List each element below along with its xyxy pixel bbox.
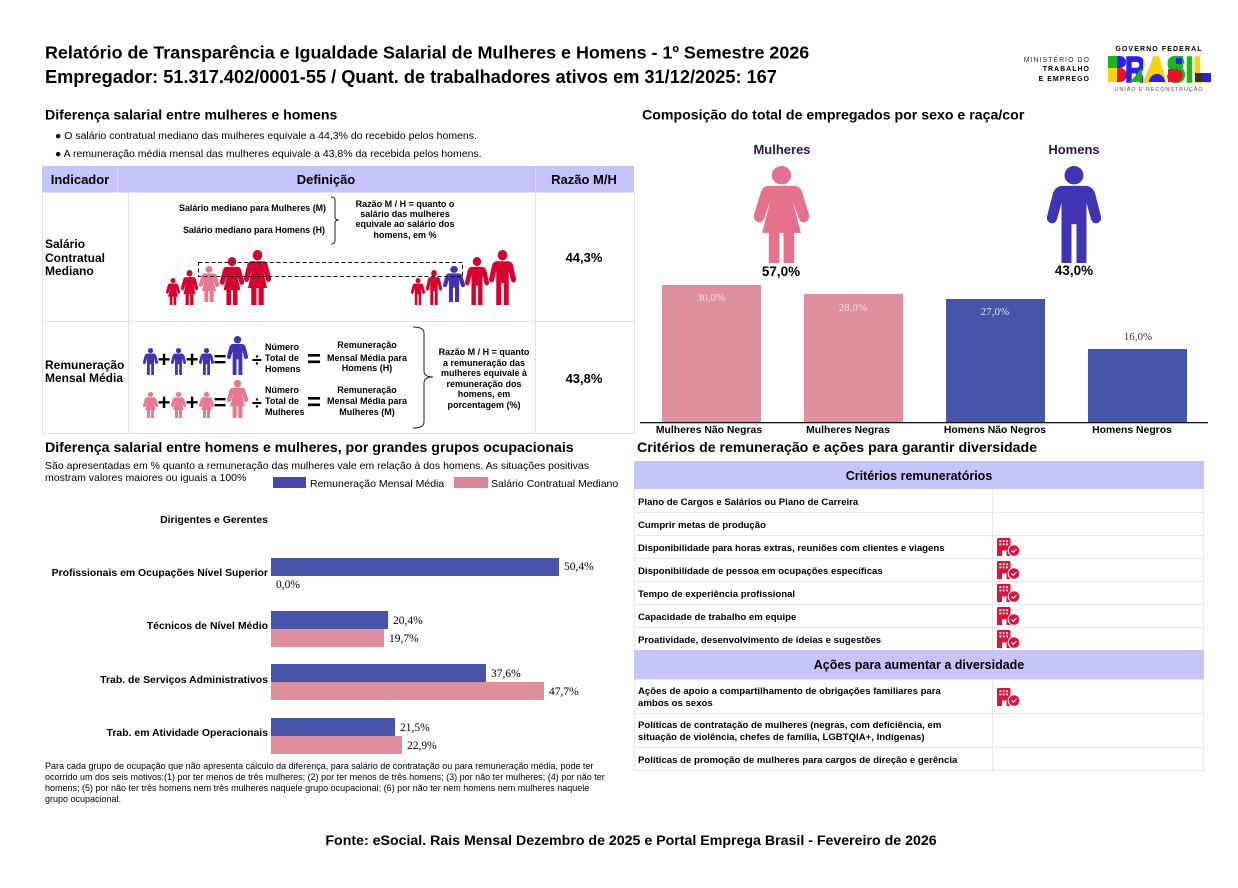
bar chart: grupos ocupacionais xyxy=(52,515,594,754)
formula: women: Mulheres xyxy=(265,407,305,417)
criteria rows: Cumprir metas de produção xyxy=(638,520,766,531)
ratio explanation: homens, em % xyxy=(373,230,437,240)
panel: criteria table xyxy=(634,461,1204,771)
table header xyxy=(42,166,634,192)
icons: criteria checks xyxy=(997,538,1020,649)
formula: women xyxy=(143,380,408,418)
criteria rows: Tempo de experiência profissional xyxy=(638,589,795,600)
action rows xyxy=(638,686,958,766)
row: salário contratual mediano xyxy=(45,197,603,305)
header: critérios remuneratórios: Critérios remuneratórios xyxy=(846,469,992,483)
formula: men: + xyxy=(186,347,198,372)
values: 37,6% xyxy=(491,668,521,680)
icons: men group xyxy=(411,250,516,305)
text block: chart subtitle: mostram valores maiores ou iguais a 100% xyxy=(45,472,246,484)
values: 20,4% xyxy=(393,615,423,627)
text block: footnote: grupo ocupacional. xyxy=(45,794,121,804)
table header: Definição xyxy=(297,172,355,187)
values: 22,9% xyxy=(407,740,437,752)
heading: diferença salarial: Diferença salarial entre mulheres e homens xyxy=(45,106,338,122)
panel: homens total: 43,0% xyxy=(1055,263,1093,278)
values xyxy=(276,561,594,752)
formula: women: + xyxy=(158,390,170,415)
formula: men: + xyxy=(158,347,170,372)
action rows: Políticas de promoção de mulheres para cargos de direção e gerência xyxy=(638,755,958,766)
row label: Mediano xyxy=(45,264,94,278)
dashed median box xyxy=(198,262,462,276)
legend: Remuneração Mensal Média xyxy=(310,478,444,490)
panel: mulheres total xyxy=(753,142,811,279)
header: critérios remuneratórios xyxy=(634,461,1204,489)
logo: ministério do trabalho e emprego: E EMPREGO xyxy=(1039,76,1090,83)
definition labels xyxy=(179,203,326,235)
brace xyxy=(413,327,433,428)
criteria rows: Capacidade de trabalho em equipe xyxy=(638,612,796,623)
bar chart: composição xyxy=(640,285,1208,436)
row: remuneração mensal média xyxy=(45,327,603,428)
logo: governo federal brasil: UNIÃO E RECONSTRUÇÃO xyxy=(1115,86,1203,93)
text block: chart subtitle xyxy=(45,460,589,484)
legend xyxy=(273,477,618,490)
action rows: Políticas de contratação de mulheres (negras, com deficiência, em xyxy=(638,720,941,731)
definition labels: Salário mediano para Mulheres (M) xyxy=(179,203,326,213)
text block: bullets: ● A remuneração média mensal das mulheres equivale a 43,8% da recebida pelos homens. xyxy=(55,148,482,160)
definition labels: Salário mediano para Homens (H) xyxy=(183,225,325,235)
logo: ministério do trabalho e emprego: MINISTÉRIO DO xyxy=(1024,55,1090,64)
panel: indicator table xyxy=(42,166,635,434)
formula: women: = xyxy=(307,389,321,416)
action rows: situação de violência, chefes de família, LGBTQIA+, Indígenas) xyxy=(638,732,925,743)
formula: women: + xyxy=(186,390,198,415)
formula: men: Remuneração xyxy=(337,340,397,350)
icons: women group xyxy=(166,250,271,305)
formula: women: Mensal Média para xyxy=(327,396,408,406)
text block: bullets xyxy=(55,130,482,160)
formula: men: Mensal Média para xyxy=(327,353,408,363)
formula: men: = xyxy=(307,346,321,373)
ratio explanation: remuneração dos xyxy=(446,379,522,389)
heading: composição: Composição do total de empregados por sexo e raça/cor xyxy=(642,108,1025,124)
logo: governo federal brasil xyxy=(1108,46,1211,93)
text block: chart subtitle: São apresentadas em % quanto a remuneração das mulheres vale em relação à dos homens. As situações positivas xyxy=(45,460,589,472)
ratio explanation: Razão M / H = quanto o xyxy=(356,199,455,209)
bar chart: composição: Mulheres Negras xyxy=(806,425,890,436)
category labels: Trab. em Atividade Operacionais xyxy=(107,728,268,739)
ratio explanation: salário das mulheres xyxy=(360,209,450,219)
brace xyxy=(331,197,339,244)
values: 50,4% xyxy=(564,561,594,573)
ratio explanation: mulheres equivale à xyxy=(441,368,528,378)
formula: women: = xyxy=(214,390,226,415)
formula: men: ÷ xyxy=(252,350,262,370)
category labels: Trab. de Serviços Administrativos xyxy=(100,675,268,686)
ratio explanation xyxy=(439,347,530,410)
title xyxy=(45,42,809,87)
logo: ministério do trabalho e emprego: TRABALHO xyxy=(1043,66,1090,73)
formula: women: Número xyxy=(265,385,300,395)
heading: grupos ocupacionais: Diferença salarial entre homens e mulheres, por grandes grupos ocupacionais xyxy=(45,440,574,456)
row label: Contratual xyxy=(45,251,105,265)
row label: Remuneração xyxy=(45,358,124,372)
category labels: Profissionais em Ocupações Nível Superior xyxy=(52,568,268,579)
text block: bullets: ● O salário contratual mediano das mulheres equivale a 44,3% do recebido pelos homens. xyxy=(55,130,477,142)
table header: Indicador xyxy=(51,172,109,187)
text block: footnote xyxy=(45,761,605,804)
text block: footnote: Para cada grupo de ocupação que não apresenta cálculo da diferença, para salário de contratação ou para remuneração média, pode ter xyxy=(45,761,593,771)
logo: governo federal brasil: GOVERNO FEDERAL xyxy=(1115,46,1203,53)
value: 44,3% xyxy=(566,250,603,265)
title: Empregador: 51.317.402/0001-55 / Quant. de trabalhadores ativos em 31/12/2025: 167 xyxy=(45,67,777,87)
category labels: Dirigentes e Gerentes xyxy=(160,515,268,526)
bar chart: composição: 28,0% xyxy=(839,302,867,314)
formula: men: Homens xyxy=(265,364,301,374)
source: Fonte: eSocial. Rais Mensal Dezembro de 2025 e Portal Emprega Brasil - Fevereiro de 2026 xyxy=(325,833,937,849)
criteria rows xyxy=(638,497,945,646)
action rows: Ações de apoio a compartilhamento de obrigações familiares para xyxy=(638,686,941,697)
bar chart: composição: Mulheres Não Negras xyxy=(656,425,762,436)
criteria rows: Proatividade, desenvolvimento de ideias e sugestões xyxy=(638,635,881,646)
row label: Salário xyxy=(45,237,85,251)
values: 0,0% xyxy=(276,579,300,591)
panel: homens total: Homens xyxy=(1048,142,1100,157)
ratio explanation: homens, em xyxy=(458,389,510,399)
category labels: Técnicos de Nível Médio xyxy=(147,621,268,632)
bar chart: composição: Homens Negros xyxy=(1092,425,1172,436)
values: 21,5% xyxy=(400,722,430,734)
bar chart: composição: Homens Não Negros xyxy=(944,425,1046,436)
formula: men: Número xyxy=(265,342,300,352)
bar chart: composição: 30,0% xyxy=(697,292,725,304)
logo: ministério do trabalho e emprego xyxy=(1024,55,1090,83)
value: 43,8% xyxy=(566,371,603,386)
ratio explanation: Razão M / H = quanto xyxy=(439,347,530,357)
bar chart: composição: 27,0% xyxy=(981,306,1009,318)
title: Relatório de Transparência e Igualdade Salarial de Mulheres e Homens - 1º Semestre 2026 xyxy=(45,42,809,62)
bar chart: composição: 16,0% xyxy=(1124,331,1152,343)
ratio explanation: a remuneração das xyxy=(443,358,525,368)
category labels xyxy=(52,515,268,739)
ratio explanation: porcentagem (%) xyxy=(447,400,521,410)
action rows: ambos os sexos xyxy=(638,698,713,709)
values: 47,7% xyxy=(549,686,579,698)
header: ações xyxy=(634,650,1204,680)
row label: Mensal Média xyxy=(45,371,123,385)
formula: women: Remuneração xyxy=(337,385,397,395)
values: 19,7% xyxy=(389,633,419,645)
formula: men: = xyxy=(214,347,226,372)
formula: men xyxy=(143,336,408,375)
criteria rows: Plano de Cargos e Salários ou Plano de Carreira xyxy=(638,497,859,508)
formula: men: Homens (H) xyxy=(342,363,392,373)
criteria rows: Disponibilidade de pessoa em ocupações específicas xyxy=(638,566,883,577)
table header: Razão M/H xyxy=(551,172,617,187)
formula: women: Total de xyxy=(265,396,299,406)
text block: footnote: homens; (5) por não ter três homens nem três mulheres naquele grupo ocupacional; (6) por não ter nem homens nem mulheres naquele xyxy=(45,783,589,793)
panel: mulheres total: Mulheres xyxy=(753,142,811,157)
header: ações: Ações para aumentar a diversidade xyxy=(814,658,1024,672)
formula: women: ÷ xyxy=(252,393,262,413)
panel: mulheres total: 57,0% xyxy=(762,264,800,279)
criteria rows: Disponibilidade para horas extras, reuniões com clientes e viagens xyxy=(638,543,945,554)
ratio explanation xyxy=(355,199,455,240)
heading: critérios: Critérios de remuneração e ações para garantir diversidade xyxy=(637,439,1037,455)
icon: action check xyxy=(997,688,1020,707)
panel: homens total xyxy=(1047,142,1101,278)
ratio explanation: equivale ao salário dos xyxy=(355,219,455,229)
legend: Salário Contratual Mediano xyxy=(491,478,618,490)
formula: men: Total de xyxy=(265,353,299,363)
text block: footnote: ocorrido um dos seis motivos:(1) por ter menos de três mulheres; (2) por ter menos de três homens; (3) por não ter mulheres; (4) por não ter xyxy=(45,772,605,782)
row label xyxy=(45,358,124,385)
row label xyxy=(45,237,105,278)
formula: women: Mulheres (M) xyxy=(339,407,395,417)
logo: governo federal brasil: RASIL xyxy=(1125,49,1211,90)
bars xyxy=(271,558,559,754)
